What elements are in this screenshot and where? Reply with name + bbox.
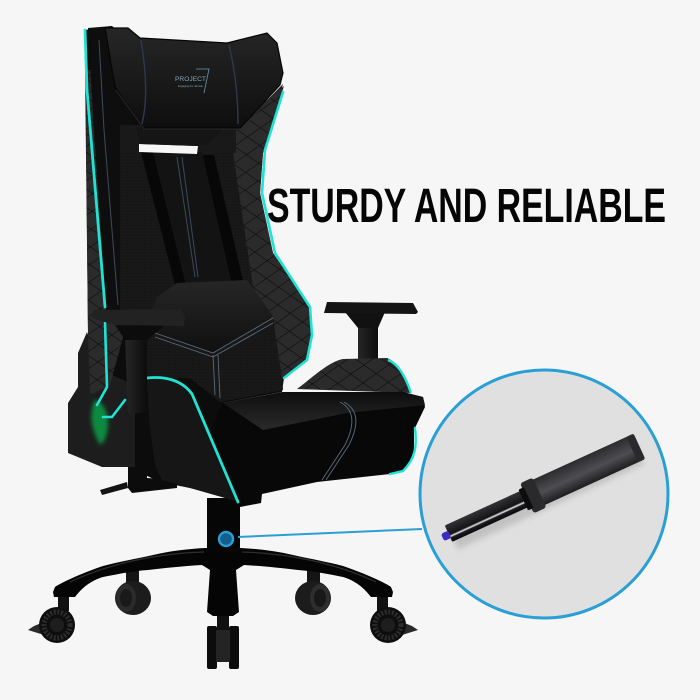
headrest logo bbox=[175, 69, 209, 93]
lower back panel bbox=[147, 318, 283, 402]
blue tip bbox=[441, 531, 451, 541]
headrest bbox=[105, 28, 283, 129]
seat rear quilted cushion bbox=[297, 358, 411, 393]
rear mechanism bbox=[68, 332, 135, 467]
right armrest bbox=[324, 302, 418, 360]
backrest side quilted panels bbox=[85, 70, 312, 395]
gas lift column bbox=[207, 498, 240, 552]
cylinder end ring bbox=[626, 434, 645, 462]
headrest logo: Engaging the ultimate bbox=[178, 84, 203, 88]
chair silhouette underlay bbox=[85, 26, 310, 498]
side seam bbox=[99, 40, 118, 305]
headrest logo: PROJECT bbox=[175, 76, 206, 83]
seat top surface bbox=[223, 392, 425, 430]
icon: rear left caster bbox=[115, 570, 151, 615]
mechanism green glow bbox=[91, 400, 108, 445]
seat side panel bbox=[147, 378, 238, 502]
star base arms bbox=[53, 548, 393, 616]
icon: front right caster bbox=[370, 597, 418, 643]
chair bbox=[28, 26, 425, 669]
cylinder rod bbox=[445, 488, 534, 542]
neck bar bbox=[139, 144, 198, 154]
backrest centre bbox=[88, 26, 253, 320]
cylinder body bbox=[530, 434, 645, 506]
cylinder flange bbox=[520, 478, 546, 513]
callout marker dot bbox=[219, 532, 233, 546]
callout circle: gas lift cylinder bbox=[420, 370, 668, 618]
icon: center front caster bbox=[207, 614, 239, 669]
cyan LED strips backrest bbox=[85, 30, 312, 417]
icon: gas cylinder bbox=[435, 432, 646, 552]
lumbar pillow bbox=[145, 280, 273, 352]
left armrest bbox=[92, 309, 185, 413]
straps bbox=[141, 152, 186, 285]
left armrest rear post and lever bbox=[100, 413, 177, 495]
cylinder shadow bbox=[449, 446, 644, 549]
chair base bbox=[28, 498, 418, 669]
callout connector line bbox=[238, 529, 422, 537]
icon: front left caster bbox=[28, 597, 75, 643]
seat cushion bbox=[205, 392, 425, 507]
icon: rear right caster bbox=[295, 570, 331, 615]
